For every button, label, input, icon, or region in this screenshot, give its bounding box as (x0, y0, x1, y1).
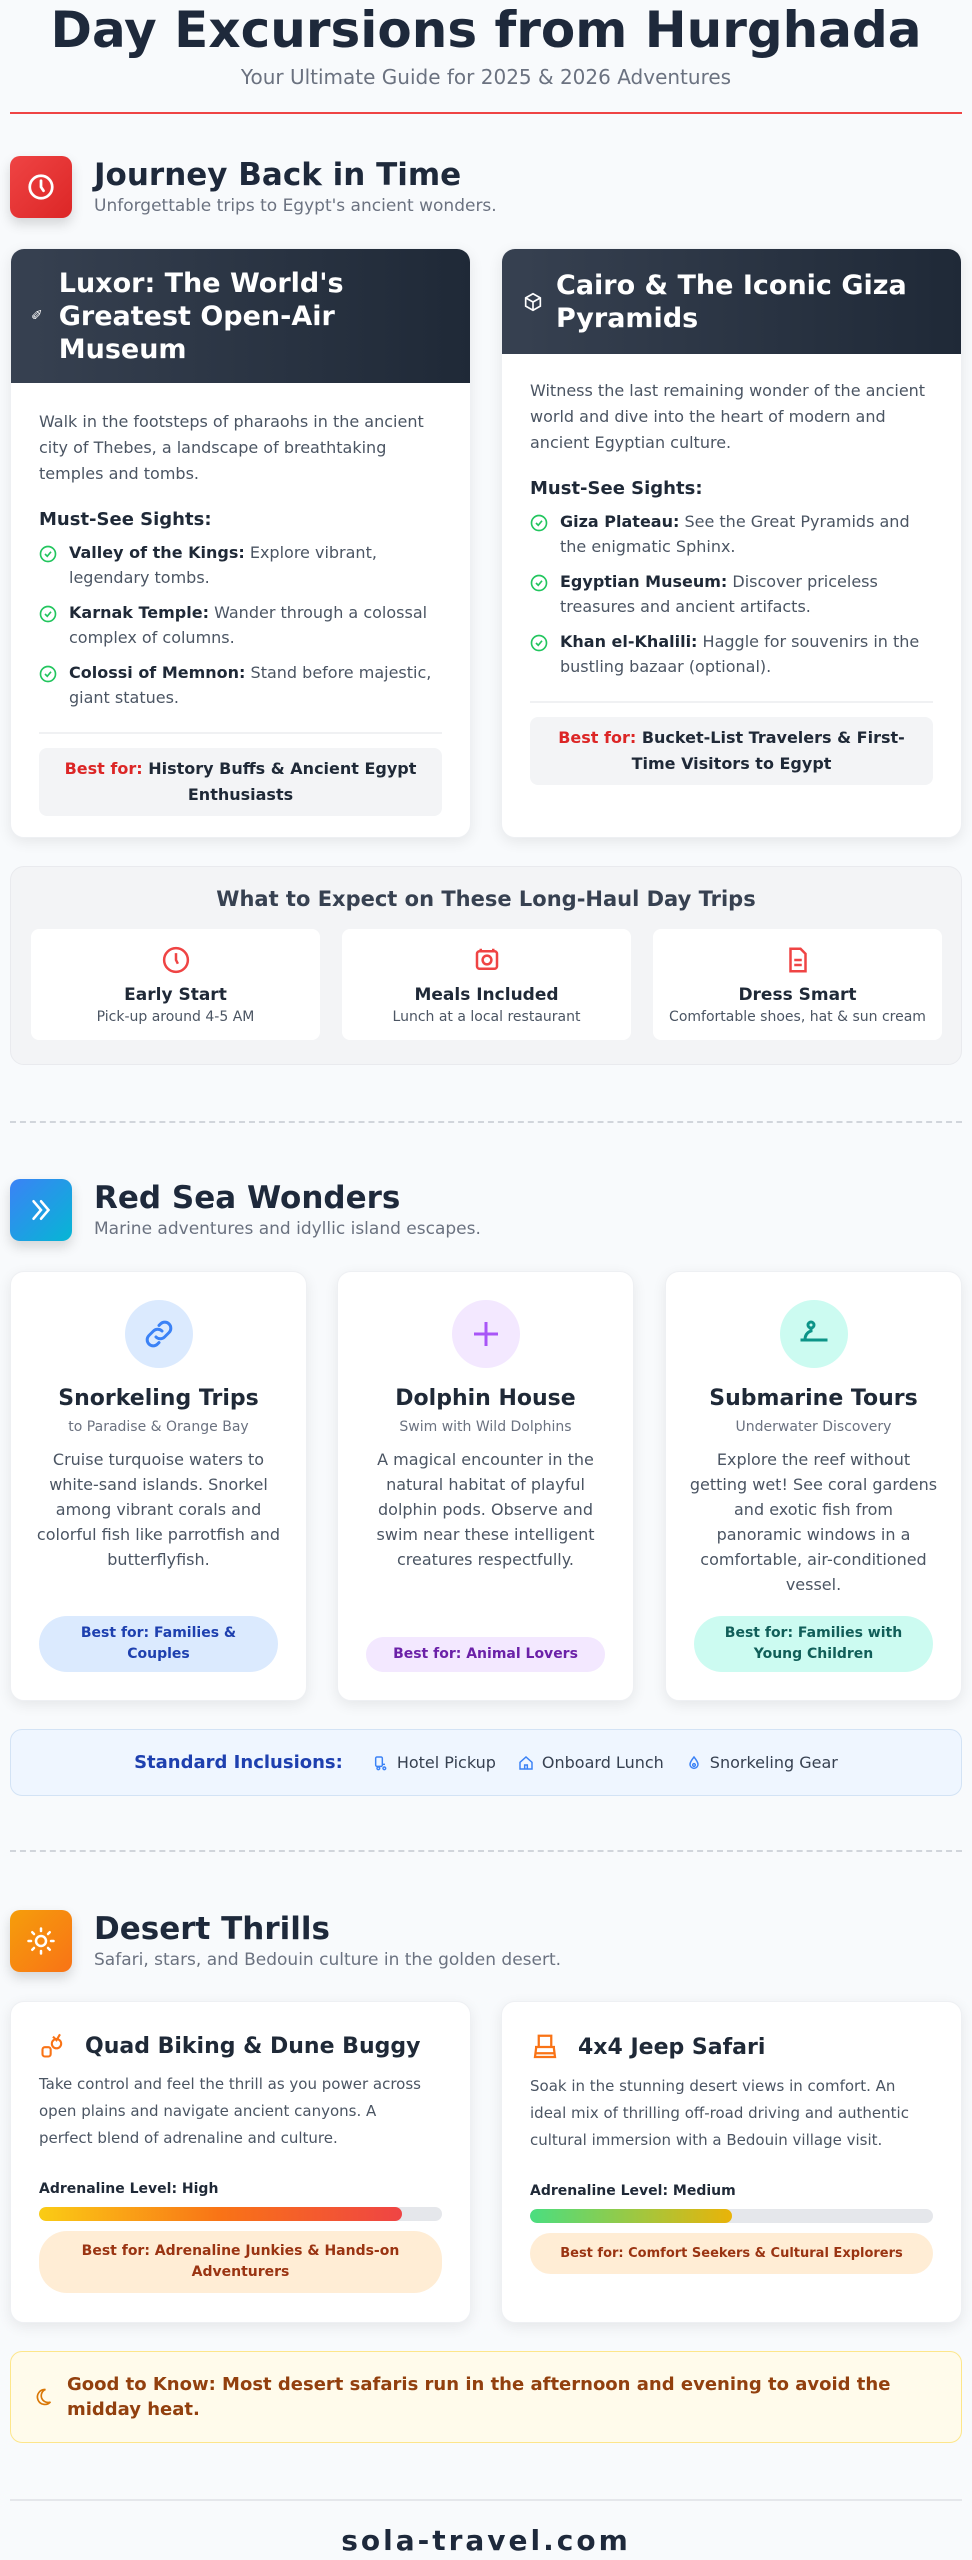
card: submarine: Submarine Tours (709, 1386, 918, 1411)
panel: Cairo: Best for: Bucket-List Travelers & First-Time Visitors to Egypt (558, 728, 905, 773)
section header: Red Sea Wonders: Red Sea Wonders (94, 1180, 400, 1216)
panel: Luxor: Colossi of Memnon: Stand before majestic, giant statues. (69, 663, 431, 707)
card: snorkeling: Snorkeling Trips (58, 1386, 259, 1411)
card: early start (31, 929, 320, 1040)
card: jeep safari: 4x4 Jeep Safari (578, 2034, 765, 2060)
card: jeep safari: ideal mix of thrilling off-road driving and authentic (530, 2104, 909, 2122)
card: submarine: panoramic windows in a (717, 1525, 910, 1544)
cairo header: Pyramids (556, 302, 698, 334)
card: meals (342, 929, 631, 1040)
luxor header: Museum (59, 334, 187, 364)
panel: standard inclusions: Standard Inclusions: (134, 1752, 343, 1773)
luxor header: ✐ (31, 308, 43, 324)
luxor header (11, 249, 470, 383)
card: snorkeling (10, 1271, 307, 1701)
card: quad biking: Adrenaline Level: High (39, 2181, 218, 2197)
section header: Red Sea Wonders: Marine adventures and idyllic island escapes. (94, 1219, 481, 1239)
section header: Desert Thrills (6, 1910, 561, 1982)
panel: Cairo: Witness the last remaining wonder of the ancient world and dive into the heart of modern and ancient Egyptian culture. (530, 381, 925, 452)
footer: sola-travel.com (341, 2524, 631, 2557)
card: quad biking: Best for: Adrenaline Junkies & Hands-on Adventurers (82, 2243, 399, 2280)
section header: Red Sea Wonders (6, 1179, 481, 1252)
panel: Luxor (10, 248, 471, 838)
panel: Luxor: Valley of the Kings: Explore vibrant, legendary tombs. (69, 543, 377, 587)
cairo header: Cairo & The Iconic Giza (556, 270, 907, 300)
panel: Cairo: Giza Plateau: See the Great Pyramids and the enigmatic Sphinx. (560, 512, 910, 556)
card: dolphin: Swim with Wild Dolphins (399, 1419, 572, 1435)
card: meals: Lunch at a local restaurant (393, 1009, 580, 1025)
section header: Journey Back in Time: Unforgettable trips to Egypt's ancient wonders. (94, 196, 497, 216)
card: jeep safari (501, 2001, 962, 2323)
section header: Desert Thrills: Safari, stars, and Bedouin culture in the golden desert. (94, 1950, 561, 1970)
card: quad biking: perfect blend of adrenaline and culture. (39, 2129, 338, 2147)
subtitle: Your Ultimate Guide for 2025 & 2026 Adventures (241, 65, 731, 89)
card: snorkeling: Best for: Families & Couples (81, 1625, 236, 1662)
panel: standard inclusions (10, 1729, 962, 1796)
card: early start: Early Start (124, 985, 227, 1005)
card: submarine: comfortable, air-conditioned (700, 1550, 927, 1569)
title: Day Excursions from Hurghada (50, 1, 922, 59)
section header: Journey Back in Time: Journey Back in Time (94, 157, 461, 193)
card: dolphin: Dolphin House (395, 1386, 576, 1411)
card: quad biking: open plains and navigate ancient canyons. A (39, 2102, 376, 2120)
card: early start: Pick-up around 4-5 AM (97, 1009, 254, 1025)
card: dress: Dress Smart (738, 985, 857, 1005)
card: meals: Meals Included (414, 985, 559, 1005)
panel: Luxor: Walk in the footsteps of pharaohs in the ancient city of Thebes, a landscape of breathtaking temples and tombs. (39, 412, 424, 483)
card: quad biking: Take control and feel the thrill as you power across (39, 2075, 421, 2093)
card: snorkeling: Cruise turquoise waters to white-sand islands. Snorkel among vibrant corals and colorful fish like parrotfish and butterflyfish. (37, 1450, 280, 1569)
panel: Luxor: Karnak Temple: Wander through a colossal complex of columns. (69, 603, 427, 647)
card: jeep safari: cultural immersion with a Bedouin village visit. (530, 2131, 882, 2149)
section header: Desert Thrills: Desert Thrills (94, 1911, 330, 1947)
card: submarine: Explore the reef without (717, 1450, 910, 1469)
card: submarine: and exotic fish from (734, 1500, 893, 1519)
section header: Journey Back in Time (6, 156, 497, 228)
heading: what to expect: What to Expect on These Long-Haul Day Trips (216, 887, 756, 911)
card: submarine: Underwater Discovery (736, 1419, 891, 1435)
panel: standard inclusions: Onboard Lunch (542, 1753, 664, 1772)
panel: Luxor: Best for: History Buffs & Ancient Egypt Enthusiasts (65, 759, 416, 804)
icon: sun (10, 1910, 72, 1972)
callout: good to know: Good to Know: Most desert safaris run in the afternoon and evening to avoid the midday heat. (67, 2374, 890, 2420)
card: jeep safari: Soak in the stunning desert views in comfort. An (530, 2077, 895, 2095)
card: submarine: vessel. (786, 1575, 841, 1594)
card: jeep safari: Adrenaline Level: Medium (530, 2183, 736, 2199)
panel: Luxor: Must-See Sights: (39, 509, 212, 530)
card: dress: Comfortable shoes, hat & sun cream (669, 1009, 926, 1025)
card: submarine: getting wet! See coral gardens (690, 1475, 937, 1494)
panel: standard inclusions: Snorkeling Gear (710, 1753, 838, 1772)
callout: good to know (10, 2351, 962, 2443)
card: dress (653, 929, 942, 1040)
card: snorkeling: to Paradise & Orange Bay (68, 1419, 249, 1435)
panel: Cairo: Khan el-Khalili: Haggle for souvenirs in the bustling bazaar (optional). (560, 632, 919, 676)
panel: Cairo: Must-See Sights: (530, 478, 703, 499)
card: dolphin (337, 1271, 634, 1701)
card: jeep safari: Best for: Comfort Seekers & Cultural Explorers (560, 2246, 903, 2261)
card: submarine: Best for: Families with Young Children (725, 1625, 902, 1662)
card: submarine (665, 1271, 962, 1701)
icon: clock (10, 156, 72, 218)
cairo header (502, 249, 961, 354)
panel: Cairo: Egyptian Museum: Discover priceless treasures and ancient artifacts. (560, 572, 878, 616)
luxor header: Greatest Open-Air (59, 300, 335, 332)
panel: what to expect (10, 866, 962, 1065)
card: quad biking (10, 2001, 471, 2323)
panel: Cairo (501, 248, 962, 838)
icon: chevrons (10, 1179, 72, 1241)
card: dolphin: A magical encounter in the natural habitat of playful dolphin pods. Observe and swim near these intelligent creatures respectfully. (377, 1450, 594, 1569)
luxor header: Luxor: The World's (59, 268, 344, 298)
card: dolphin: Best for: Animal Lovers (393, 1646, 578, 1662)
card: quad biking: Quad Biking & Dune Buggy (85, 2034, 420, 2058)
panel: standard inclusions: Hotel Pickup (397, 1753, 496, 1772)
